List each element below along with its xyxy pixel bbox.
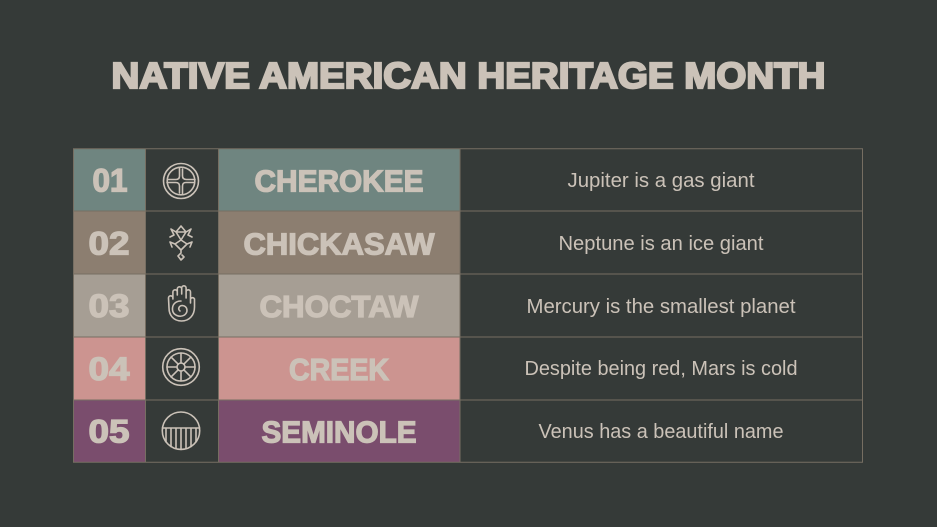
name cell Choctaw: CHOCTAW	[260, 289, 419, 324]
name cell Seminole: SEMINOLE	[262, 414, 416, 450]
number cell 01	[73, 149, 145, 211]
name cell Seminole	[218, 400, 460, 462]
icon: circular cross	[164, 164, 198, 198]
row 3: Choctaw	[73, 274, 796, 337]
icon: half-striped circle	[162, 412, 200, 449]
icon: lizard	[170, 226, 192, 260]
number cell 02: 02	[88, 226, 130, 262]
description: Venus has a beautiful name	[538, 420, 784, 443]
number cell 02	[73, 211, 145, 274]
name cell Chickasaw: CHICKASAW	[244, 226, 435, 262]
row 4: Creek	[73, 337, 798, 400]
number cell 03: 03	[88, 288, 130, 324]
number cell 04	[73, 337, 145, 400]
name cell Creek: CREEK	[289, 352, 390, 387]
name cell Choctaw	[218, 274, 460, 337]
row 5: Seminole	[73, 400, 784, 462]
number cell 03	[73, 274, 145, 337]
icon: wheel	[163, 349, 199, 385]
name cell Cherokee: CHEROKEE	[254, 164, 424, 198]
description: Neptune is an ice giant	[558, 232, 764, 255]
icon: spiral hand	[168, 286, 194, 321]
description: Jupiter is a gas giant	[568, 169, 755, 192]
row 1: Cherokee	[73, 149, 755, 211]
title: NATIVE AMERICAN HERITAGE MONTH	[112, 55, 826, 96]
number cell 01: 01	[92, 162, 128, 198]
name cell Creek	[218, 337, 460, 400]
number cell 04: 04	[88, 351, 130, 387]
table	[73, 149, 862, 462]
number cell 05	[73, 400, 145, 462]
name cell Chickasaw	[218, 211, 460, 274]
number cell 05: 05	[88, 414, 130, 450]
name cell Cherokee	[218, 149, 460, 211]
description: Mercury is the smallest planet	[526, 295, 796, 318]
row 2: Chickasaw	[73, 211, 764, 274]
description: Despite being red, Mars is cold	[524, 357, 798, 380]
